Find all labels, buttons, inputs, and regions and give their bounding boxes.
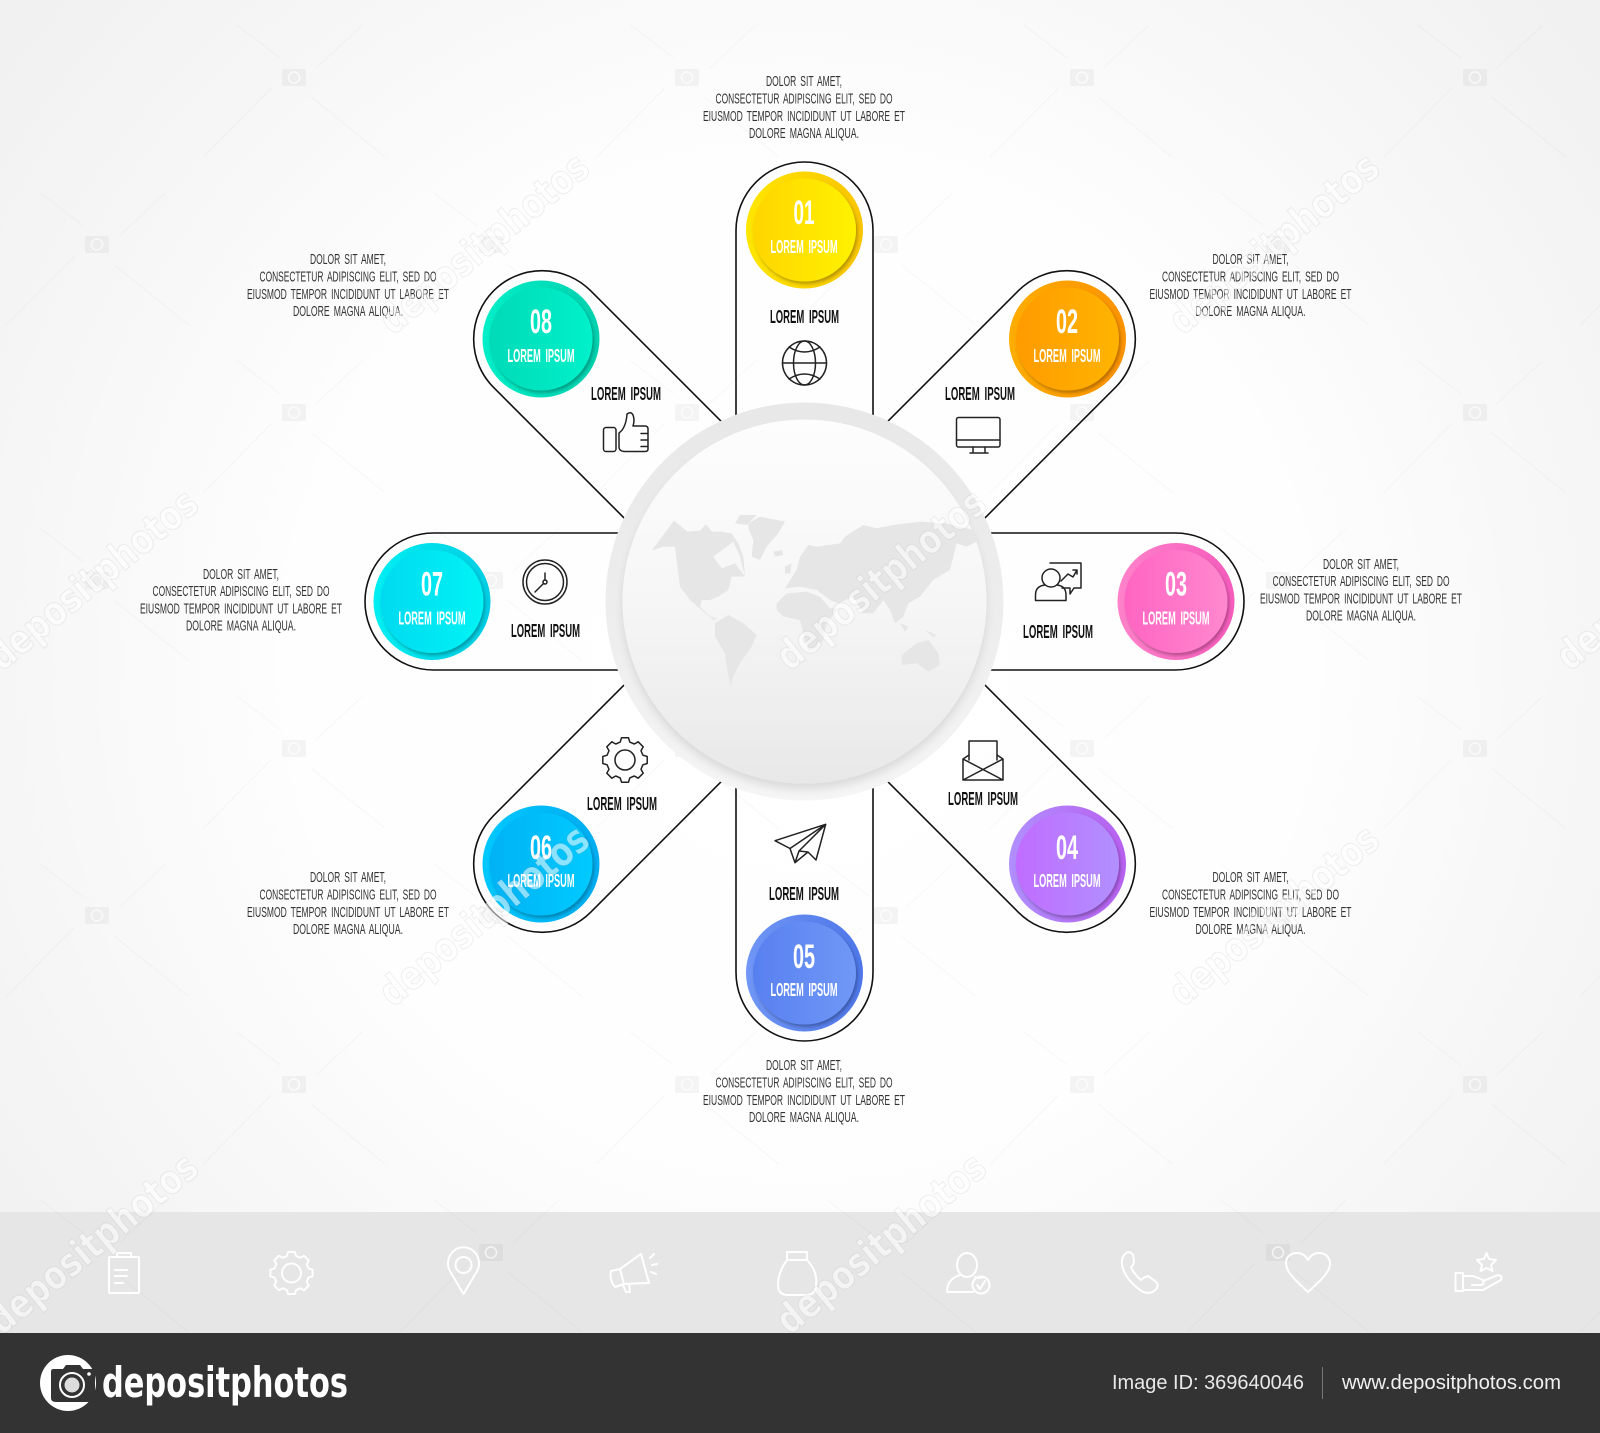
badge 06 [482, 806, 600, 922]
heading 08: LOREM IPSUM [591, 384, 661, 404]
step 07 [140, 543, 580, 660]
description 05: CONSECTETUR ADIPISCING ELIT, SED DO [716, 1074, 892, 1092]
badge 03: 03 [1165, 566, 1187, 604]
description 06: DOLORE MAGNA ALIQUA. [293, 921, 403, 938]
heading 05: LOREM IPSUM [769, 884, 839, 904]
description 02: CONSECTETUR ADIPISCING ELIT, SED DO [1162, 268, 1339, 286]
description 08: EIUSMOD TEMPOR INCIDIDUNT UT LABORE ET [247, 286, 449, 303]
icon: verified user [947, 1253, 990, 1294]
description 03: DOLOR SIT AMET, [1323, 556, 1399, 573]
icon: presenter with chart [1036, 563, 1081, 600]
badge 02 [1009, 280, 1126, 398]
icon: paper plane [775, 824, 826, 863]
description 05 [703, 1057, 905, 1126]
diagonal watermark text: depositphotos [767, 1144, 995, 1344]
description 04: DOLORE MAGNA ALIQUA. [1196, 921, 1306, 938]
icon: globe [782, 341, 826, 385]
description 04 [1150, 869, 1352, 938]
description 02: DOLOR SIT AMET, [1212, 251, 1288, 268]
badge 02: 02 [1056, 303, 1078, 341]
capsule outlines [365, 162, 1244, 1041]
badge 08 [482, 280, 600, 398]
description 06: DOLOR SIT AMET, [310, 869, 386, 886]
diagonal watermark text: depositphotos [370, 144, 598, 344]
step 04 [948, 741, 1352, 938]
logo wordmark: depositphotos [102, 1358, 348, 1407]
description 08 [247, 251, 449, 320]
icon: hand with star [1456, 1253, 1502, 1291]
description 05: DOLOR SIT AMET, [766, 1057, 842, 1074]
icon: map pin [448, 1247, 479, 1294]
badge 05: LOREM IPSUM [770, 980, 838, 1000]
description 01: EIUSMOD TEMPOR INCIDIDUNT UT LABORE ET [703, 108, 905, 125]
world map [652, 515, 980, 687]
heading 02: LOREM IPSUM [945, 384, 1015, 404]
description 03: CONSECTETUR ADIPISCING ELIT, SED DO [1272, 573, 1450, 590]
icon: open envelope [963, 741, 1003, 780]
watermark camera marks [85, 69, 1487, 1261]
icon: thumbs up [604, 413, 648, 452]
description 07: DOLORE MAGNA ALIQUA. [186, 618, 296, 634]
step 02 [945, 251, 1352, 453]
footer bar [0, 1333, 1600, 1433]
description 06: EIUSMOD TEMPOR INCIDIDUNT UT LABORE ET [247, 904, 449, 921]
badge 05: 05 [793, 938, 815, 976]
description 07: EIUSMOD TEMPOR INCIDIDUNT UT LABORE ET [140, 600, 342, 618]
description 07: CONSECTETUR ADIPISCING ELIT, SED DO [152, 583, 330, 600]
description 06 [247, 869, 449, 938]
description 01 [703, 73, 905, 142]
description 07: DOLOR SIT AMET, [203, 566, 279, 583]
description 07 [140, 566, 342, 634]
badge 07: LOREM IPSUM [398, 608, 466, 628]
badge 06: LOREM IPSUM [508, 871, 574, 891]
description 01: DOLORE MAGNA ALIQUA. [749, 125, 859, 142]
logo icon: camera in circle [40, 1355, 96, 1411]
description 01: CONSECTETUR ADIPISCING ELIT, SED DO [716, 90, 892, 108]
description 03: DOLORE MAGNA ALIQUA. [1306, 608, 1416, 624]
heading 03: LOREM IPSUM [1023, 622, 1093, 642]
description 08: DOLORE MAGNA ALIQUA. [293, 303, 403, 320]
badge 01 [746, 172, 863, 288]
icon row in band [109, 1247, 1502, 1295]
step 01 [703, 73, 905, 385]
icon: clock [523, 560, 567, 604]
description 04: EIUSMOD TEMPOR INCIDIDUNT UT LABORE ET [1150, 904, 1352, 921]
description 05: DOLORE MAGNA ALIQUA. [749, 1109, 859, 1126]
diagonal watermark text: depositphotos [1160, 816, 1388, 1016]
icon: megaphone [610, 1254, 657, 1292]
badge 01: LOREM IPSUM [770, 237, 838, 257]
heading 01: LOREM IPSUM [770, 307, 839, 327]
diagonal watermark text: depositphotos [370, 816, 598, 1016]
step 05 [703, 824, 905, 1126]
badge 03: LOREM IPSUM [1142, 608, 1210, 628]
step 06 [247, 738, 657, 938]
icon: gear [270, 1252, 313, 1294]
diagonal watermark text: depositphotos [767, 480, 995, 680]
description 06: CONSECTETUR ADIPISCING ELIT, SED DO [260, 886, 436, 904]
description 02 [1150, 251, 1352, 320]
description 05: EIUSMOD TEMPOR INCIDIDUNT UT LABORE ET [703, 1092, 905, 1109]
icon: phone [1122, 1252, 1158, 1293]
icon: bag [778, 1252, 816, 1295]
icon strip band [0, 1212, 1600, 1333]
description 08: DOLOR SIT AMET, [310, 251, 386, 268]
badge 01: 01 [794, 194, 814, 232]
badge 07 [374, 543, 490, 660]
description 04: DOLOR SIT AMET, [1212, 869, 1288, 886]
central circle with world map [606, 402, 1004, 800]
heading 06: LOREM IPSUM [587, 794, 657, 814]
description 04: CONSECTETUR ADIPISCING ELIT, SED DO [1162, 886, 1339, 904]
step 03 [1023, 543, 1462, 660]
badge 08: 08 [530, 303, 552, 341]
badge 04 [1009, 806, 1126, 922]
badge 03 [1118, 543, 1234, 660]
heading 04: LOREM IPSUM [948, 789, 1018, 809]
badge 07: 07 [421, 566, 443, 604]
badge 08: LOREM IPSUM [508, 346, 574, 366]
description 08: CONSECTETUR ADIPISCING ELIT, SED DO [260, 268, 436, 286]
badge 04: LOREM IPSUM [1034, 871, 1100, 891]
heading 07: LOREM IPSUM [511, 621, 580, 641]
website: www.depositphotos.com [1341, 1372, 1561, 1394]
badge 06: 06 [530, 829, 552, 867]
diagonal watermark text: depositphotos [1160, 144, 1388, 344]
icon: heart [1286, 1253, 1330, 1292]
description 01: DOLOR SIT AMET, [766, 73, 842, 90]
icon: gear [603, 738, 647, 782]
icon: monitor [956, 418, 1000, 453]
description 02: EIUSMOD TEMPOR INCIDIDUNT UT LABORE ET [1150, 286, 1352, 303]
description 02: DOLORE MAGNA ALIQUA. [1196, 303, 1306, 320]
step 08 [247, 251, 661, 452]
icon: clipboard [109, 1253, 139, 1293]
badge 02: LOREM IPSUM [1034, 346, 1100, 366]
badge 05 [746, 914, 863, 1032]
description 03 [1260, 556, 1462, 624]
image id: Image ID: 369640046 [1112, 1372, 1304, 1394]
badge 04: 04 [1056, 829, 1078, 867]
